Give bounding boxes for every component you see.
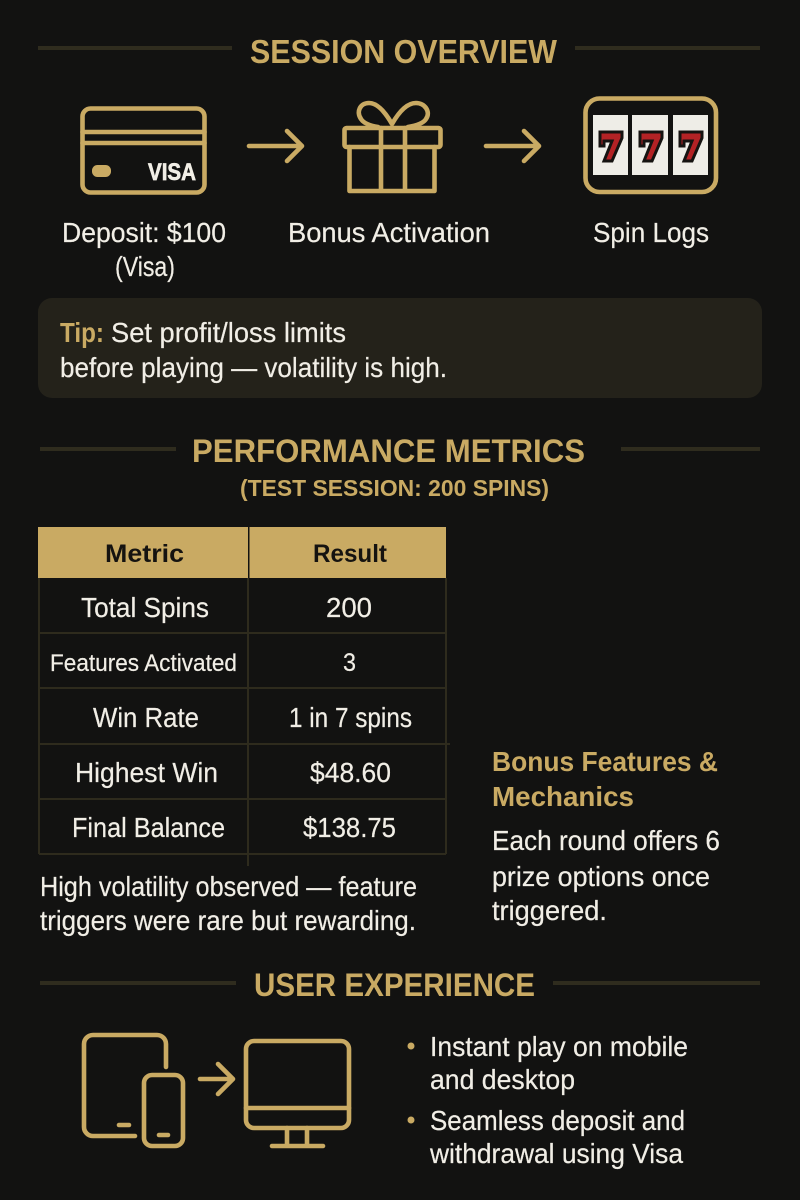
callout: tip: Set profit/loss limits bbox=[111, 317, 346, 348]
heading: user experience: USER EXPERIENCE bbox=[254, 967, 535, 1003]
row: features activated: 3 bbox=[343, 649, 356, 677]
callout: tip: before playing — volatility is high. bbox=[60, 352, 447, 383]
row: features activated: Features Activated bbox=[50, 650, 237, 677]
row: highest win: Highest Win bbox=[75, 757, 218, 788]
list: user experience points bbox=[408, 1031, 688, 1169]
icon: gift box bbox=[344, 103, 440, 191]
row: final balance bbox=[72, 812, 396, 843]
callout: tip bbox=[38, 298, 762, 398]
icon: 777 slot machine bbox=[586, 98, 716, 192]
text: bonus features and mechanics: Mechanics bbox=[492, 781, 634, 812]
text: bonus features and mechanics: prize options once bbox=[492, 861, 710, 892]
heading: performance metrics: PERFORMANCE METRICS bbox=[192, 433, 585, 469]
arrow: bonus to spins bbox=[486, 131, 539, 161]
table header bbox=[38, 527, 446, 578]
row: total spins: Total Spins bbox=[81, 592, 209, 623]
text: volatility note: High volatility observed — feature bbox=[40, 871, 417, 902]
icon: Visa credit card: VISA bbox=[148, 159, 196, 186]
row: final balance: Final Balance bbox=[72, 812, 225, 843]
arrow: mobile to desktop bbox=[200, 1064, 233, 1094]
row: final balance: $138.75 bbox=[303, 812, 396, 843]
callout: tip: Tip: bbox=[60, 317, 104, 348]
heading: performance metrics bbox=[192, 433, 585, 501]
text: bonus features and mechanics: Bonus Features & bbox=[492, 746, 718, 777]
text: volatility note bbox=[40, 871, 417, 936]
label: spin logs: Spin Logs bbox=[593, 217, 709, 248]
list: user experience points: withdrawal using Visa bbox=[429, 1138, 683, 1169]
label: deposit: Deposit: $100 bbox=[62, 217, 226, 248]
heading: session overview: SESSION OVERVIEW bbox=[250, 33, 558, 70]
table header: Result bbox=[313, 540, 388, 568]
label: deposit: (Visa) bbox=[115, 251, 175, 282]
row: win rate: 1 in 7 spins bbox=[289, 702, 412, 733]
row: total spins: 200 bbox=[326, 592, 372, 623]
text: bonus features and mechanics bbox=[492, 746, 720, 926]
icon: Visa credit card bbox=[82, 108, 204, 192]
row: win rate: Win Rate bbox=[93, 702, 199, 733]
heading: performance metrics: (TEST SESSION: 200 SPINS) bbox=[240, 475, 549, 501]
row: total spins bbox=[81, 592, 372, 623]
icon: desktop monitor bbox=[246, 1041, 349, 1146]
text: bonus features and mechanics: triggered. bbox=[492, 895, 607, 926]
text: volatility note: triggers were rare but rewarding. bbox=[40, 905, 416, 936]
text: bonus features and mechanics: Each round offers 6 bbox=[492, 825, 720, 856]
list: user experience points: Seamless deposit and bbox=[430, 1105, 685, 1136]
list: user experience points: Instant play on mobile bbox=[430, 1031, 688, 1062]
table header: Metric bbox=[105, 540, 184, 568]
arrow: deposit to bonus bbox=[249, 131, 302, 161]
row: win rate bbox=[93, 702, 412, 733]
label: deposit bbox=[62, 217, 226, 282]
row: features activated bbox=[50, 649, 356, 677]
label: bonus activation: Bonus Activation bbox=[288, 217, 490, 248]
icon: tablet and phone bbox=[84, 1035, 183, 1146]
table: metrics and results bbox=[38, 527, 450, 866]
list: user experience points: and desktop bbox=[430, 1064, 575, 1095]
row: highest win bbox=[75, 757, 391, 788]
row: highest win: $48.60 bbox=[310, 757, 391, 788]
